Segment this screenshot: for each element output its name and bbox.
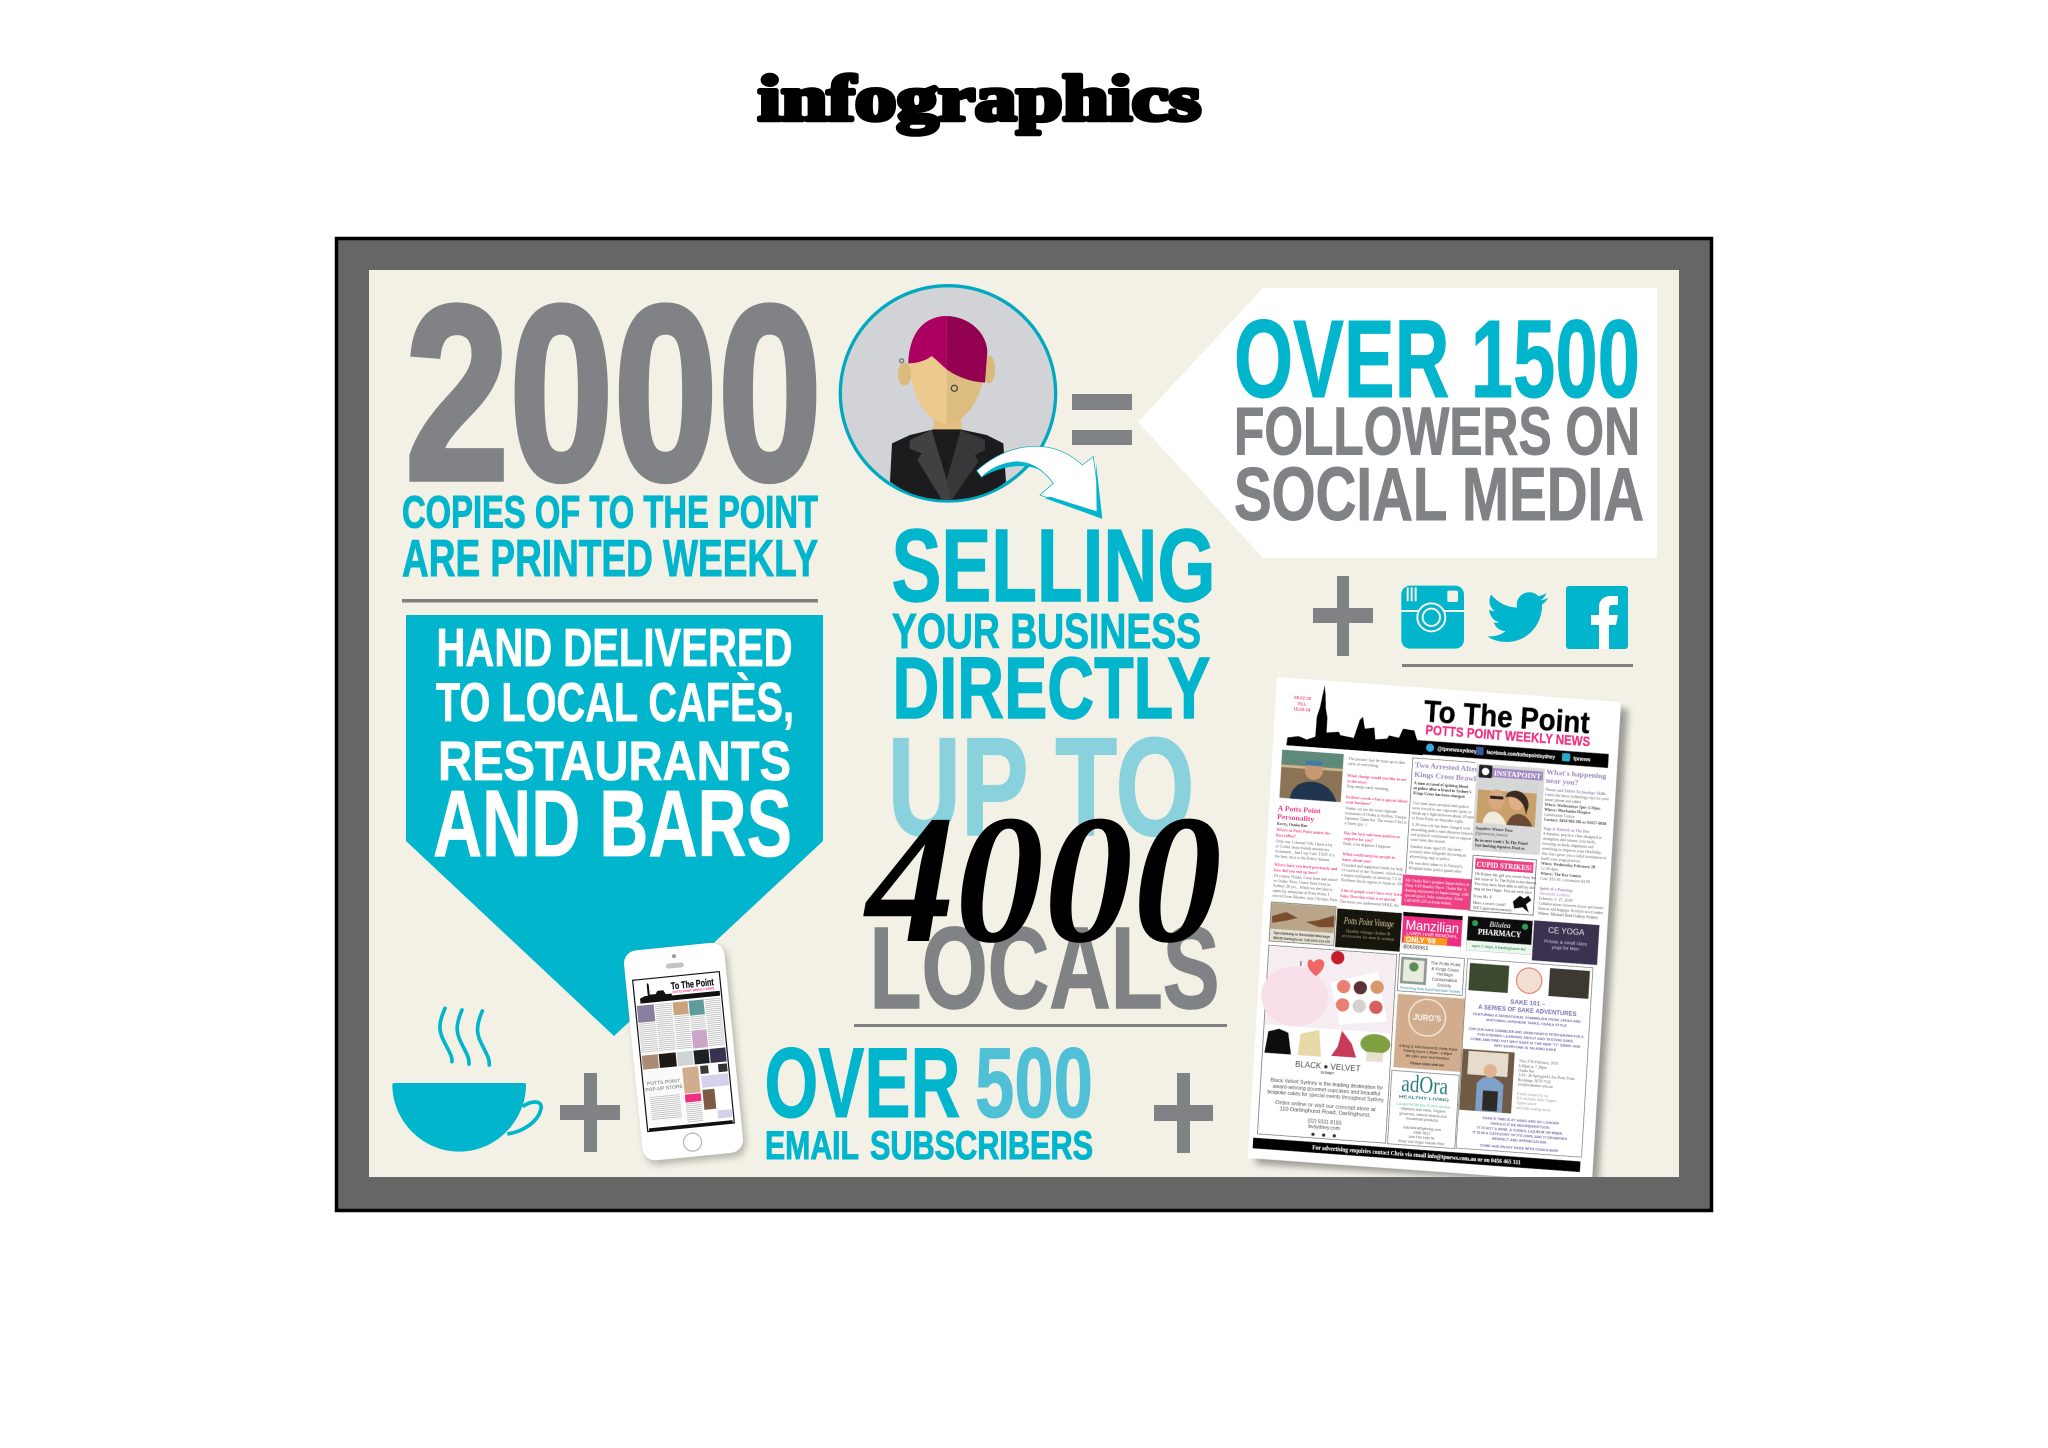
column: what's happening: Yoga & Rebirth at The Rex — [1543, 826, 1590, 834]
advert: black velvet cupcakes: I — [1300, 959, 1302, 968]
column: two arrested article: A 28-year-old has been charged with — [1411, 822, 1470, 831]
advert: adora healthy living: Vitamins and minis, Organic — [1400, 1107, 1446, 1114]
column: what's happening: Community Centre — [1544, 812, 1575, 819]
column: what's happening: What's happening — [1546, 767, 1607, 781]
stat: over 500 email subscribers — [764, 1027, 1093, 1168]
column: interview continued: What change would you like to see — [1347, 773, 1407, 782]
column: what's happening: When: Wednesdays 2pm-3.30pm — [1544, 802, 1601, 811]
icon: smartphone showing newsletter — [623, 941, 747, 1166]
icon: avatar portrait in circle — [840, 286, 1056, 501]
speech callout: over 1500 followers — [1138, 288, 1657, 558]
newsletter masthead: 15.02.18 — [1293, 706, 1311, 713]
column: interview continued: The more you understand SAKE, the — [1340, 899, 1399, 909]
advert: sake 101: Tues 27th February, 2018 — [1519, 1059, 1558, 1067]
column: two arrested article: in Potts Point on Saturday night. — [1412, 815, 1464, 824]
advert: black velvet cupcakes — [1253, 945, 1397, 1143]
column: what's happening: Roscar and bagpipe Scottish wool maker — [1538, 906, 1604, 915]
column: what's happening: stretching to improve your flexibility, — [1542, 846, 1602, 856]
column: two arrested article: Another man, aged 25, has been — [1410, 843, 1462, 853]
column: two arrested article: assaulting police and offensive behaviour — [1411, 827, 1478, 837]
column: cupid strikes: You may have been able to tell by the — [1474, 881, 1535, 890]
newsletter masthead: To The Point — [1423, 693, 1591, 740]
column: interview continued: know about you? — [1342, 857, 1372, 864]
column: interview continued: in the area? — [1347, 778, 1367, 785]
advert: adora healthy living: Local FROM the PODS similar — [1396, 1101, 1451, 1109]
banner text: RESTAURANTS — [438, 729, 791, 792]
advert: heritage society: Preserving Potts Point Past Each Century — [1400, 986, 1461, 994]
column: Potts Point personality: open my restaurant at Potts Point, I — [1273, 888, 1330, 898]
advert: sake 101 — [1456, 959, 1593, 1157]
advert: adora healthy living: Join The Hub St. — [1408, 1135, 1435, 1141]
icon: facebook — [1566, 586, 1628, 649]
column: what's happening: Learn the latest technology tips for your — [1545, 792, 1610, 802]
advert: sake 101: Osaka Bar — [1518, 1069, 1535, 1074]
advert: sake 101: and Sake tasting menu — [1516, 1106, 1551, 1112]
icon: plus sign before social icons — [1313, 576, 1373, 656]
column: Potts Point personality: restaurant... but I say Cafe TXST 4 is — [1275, 848, 1335, 858]
newsletter page: To The Point — [1248, 677, 1628, 1186]
column: cupid strikes: last issue of To The Point is not shown. — [1474, 876, 1537, 885]
ad: potts point vintage: Quality vintage clothes & — [1346, 928, 1391, 936]
ad: pharmacy: PHARMACY — [1478, 927, 1521, 939]
column: what's happening: Collaborations between music performer — [1538, 901, 1605, 910]
column: two arrested article: advertising sign at police. — [1409, 853, 1451, 861]
advert: black velvet cupcakes: SYDNEY — [1320, 1071, 1335, 1076]
column: interview continued: a funny guy :) — [1344, 820, 1368, 827]
column: interview continued: negative for you? — [1343, 836, 1373, 843]
column: interview continued: Stop ramps early morning. — [1347, 784, 1389, 792]
icon: equals sign — [1072, 394, 1132, 445]
column: interview continued: A lot of people won't have ever tried — [1340, 888, 1403, 897]
column: what's happening: smart phone and tablet. — [1545, 797, 1582, 805]
icon: instagram — [1401, 586, 1464, 649]
column: two arrested article: Hospital under police guard after — [1409, 865, 1462, 874]
advert: heritage society: Society — [1437, 982, 1452, 988]
arrow: from avatar to selling text — [977, 446, 1102, 519]
ad: pharmacy — [1466, 916, 1533, 955]
advert: adora healthy living: adOra — [1401, 1071, 1449, 1101]
newsletter masthead: POTTS POINT WEEKLY NEWS — [1425, 722, 1591, 749]
column: Potts Point personality — [1272, 750, 1347, 904]
footer bar of newsletter — [1253, 1138, 1581, 1172]
column: interview continued: Japanese Tapas bar. The owner Chef is — [1345, 815, 1407, 825]
advert: sake 101: JOIN OUR SAKE SOMMELIER AND JAPAN FANATIC PETER BROWN FOR A — [1468, 1027, 1584, 1039]
column: interview continued: restaurant of Osaka in Sydney. Unique — [1345, 810, 1407, 820]
ad: CE yoga: yoga for Men — [1552, 945, 1579, 952]
advert: sake 101: FUN EVENING LEARNING ABOUT AND TASTING SAKE. — [1477, 1032, 1574, 1043]
newsletter masthead: TILL — [1297, 701, 1307, 707]
phone screen: POP-UP STORE — [645, 1084, 684, 1094]
column: interview continued — [1340, 756, 1413, 909]
column: Potts Point personality: in Osaka. Now, I have been lived in — [1273, 878, 1331, 888]
locals: LOCALS — [870, 903, 1220, 1033]
advert: juro's: 4 Shop 5, 149 Victoria St, Potts Point — [1399, 1044, 1458, 1052]
column: instapoint: Just hashtag #tpnews Find us — [1474, 842, 1525, 851]
advert: heritage society — [1397, 954, 1465, 995]
column: what's happening: Where: Maybanke Hospice — [1544, 807, 1591, 815]
stat: 2000 copies printed weekly — [402, 254, 822, 588]
newsletter masthead: tpnews — [1573, 756, 1591, 763]
column: Potts Point personality: Of course, Osaka. I was born and raised — [1274, 873, 1338, 884]
ad: pharmacy: open 7 days, 9 Darlinghurst Rd — [1472, 944, 1526, 952]
500 number: 500 — [975, 1027, 1093, 1138]
banner text: AND BARS — [433, 771, 792, 877]
ad: CE yoga: Private & small class — [1544, 938, 1588, 947]
column: instapoint: @geminicat_bearers — [1475, 830, 1509, 838]
column: what's happening: Phone and Tablet Technology Skills — [1545, 787, 1606, 796]
advert: heritage society: & Kings Cross — [1431, 966, 1459, 973]
column: cupid strikes: From Mr. P — [1473, 893, 1493, 900]
column: interview continued: What would surprise people to — [1343, 851, 1395, 860]
directly: DIRECTLY — [892, 640, 1210, 737]
column: instapoint — [1472, 764, 1545, 855]
column: Potts Point personality: Where have you lived previously and — [1274, 862, 1338, 872]
copies caption line 1: COPIES OF TO THE POINT — [402, 486, 818, 538]
column: Potts Point personality: Kerry, Osaka Bar — [1277, 821, 1308, 828]
column: what's happening: 12.30-4pm — [1541, 866, 1559, 872]
column: interview continued: The person! Just let must up to date — [1348, 756, 1406, 765]
advert: sake 101: COME AND ENJOY SAKE WITH OSAKA BAR! — [1480, 1143, 1559, 1153]
phone screen — [633, 972, 734, 1132]
column: cupid strikes — [1470, 855, 1538, 915]
ad: potts point vintage: accessories for men & women — [1342, 933, 1395, 942]
column: two arrested article: Kings Cross has been charged. — [1413, 790, 1466, 799]
column: interview continued: Both, a lot negative I suppose. — [1343, 841, 1392, 850]
text block: selling your business directly — [892, 508, 1216, 737]
column: interview continued: Osaka, we are the most regional — [1345, 805, 1398, 815]
advert: sake 101: SAKE 101 – — [1510, 999, 1546, 1008]
advert: juro's: Trading hours 7.30am - 4.30pm — [1403, 1049, 1452, 1056]
column: interview continued: Has the luck suit been positive or — [1344, 830, 1401, 839]
advert: sake 101: info@osakabar.com.au — [1517, 1083, 1553, 1089]
advert: adora healthy living — [1387, 1070, 1459, 1149]
advert: sake 101: Kindly hosted by us: — [1517, 1092, 1549, 1098]
column: instapoint: Sapphire Winter Pom — [1475, 825, 1513, 833]
column: two arrested article: Two Arrested After — [1415, 760, 1479, 774]
advert: black velvet cupcakes: BLACK ● VELVET — [1295, 1060, 1361, 1073]
column: two arrested article: Call 0430 225 to book tickets. — [1404, 897, 1452, 906]
ad: CE yoga: CE YOGA — [1548, 926, 1585, 938]
advert: sake 101: IT IS IN A CATEGORY OF ITS OWN, AND IT DESERVES — [1472, 1130, 1568, 1141]
column: what's happening: build your yoga practice. — [1541, 856, 1581, 863]
column: what's happening: Where: The Rex Centre — [1540, 871, 1581, 879]
column: Potts Point personality: A Potts Point — [1278, 803, 1321, 815]
email subscribers caption — [765, 1124, 1093, 1168]
advert: black velvet cupcakes: bespoke cakes for special events throughout Sydney. — [1267, 1089, 1385, 1104]
ad: potts point vintage — [1335, 908, 1402, 952]
column: cupid strikes: Have a secret crush? — [1473, 900, 1506, 907]
email subscribers caption: EMAIL — [765, 1124, 859, 1168]
advert: adora healthy living: adorahealthyliving.com — [1403, 1125, 1441, 1132]
advert: adora healthy living: 9380 9812 — [1413, 1131, 1431, 1136]
advert: black velvet cupcakes: (02) 9331 8183 — [1307, 1118, 1342, 1127]
advert: sake 101: 1/24 - 26 Springfield Ave Potts Point — [1518, 1073, 1576, 1081]
column: two arrested article: My Osaka Bar's premier Japan dishes at — [1405, 877, 1470, 887]
advert: sake 101: SHOULD IT BE MISUNDERSTOOD. — [1490, 1121, 1551, 1130]
column: two arrested article: at police after a brawl in Sydney's — [1413, 785, 1472, 794]
column: what's happening — [1538, 767, 1613, 920]
column: Potts Point personality: Only one I choose? Oh, I have a lot — [1276, 838, 1333, 848]
column: two arrested article: were forced to use capsicum spray to — [1412, 805, 1472, 814]
column: two arrested article: A man accused of spitting blood — [1414, 780, 1469, 789]
icon: coffee cup with steam — [392, 1008, 541, 1152]
big number 2000: 2000 — [405, 254, 822, 532]
column: interview continued: In three words what is special about — [1346, 794, 1408, 804]
advert: sake 101: IT IS NOT A WINE, A VODKA, LIQUEUR OR BEER. — [1477, 1125, 1563, 1136]
column: what's happening: Alexander Lyubkin — [1539, 891, 1570, 898]
column: two arrested article: Kings Cross Brawl — [1414, 770, 1476, 783]
over 1500: OVER 1500 — [1234, 298, 1640, 421]
ad: manzilian — [1401, 912, 1463, 954]
column: two arrested article: arrested after allegedly throwing an — [1410, 848, 1467, 857]
your business: YOUR BUSINESS — [892, 605, 1201, 659]
newsletter masthead — [1286, 683, 1612, 769]
advert: sake 101: Appreciation — [1516, 1101, 1537, 1107]
advert: heritage society: Heritage — [1437, 972, 1454, 978]
advert: adora healthy living: HEALTHY LIVING — [1399, 1094, 1450, 1103]
advert: black velvet cupcakes: award-winning gourmet cupcakes and beautiful — [1272, 1084, 1380, 1098]
column: Potts Point personality: moved from Rhodes, near Olympic Park. — [1272, 893, 1338, 904]
ad: massage therapy — [1269, 902, 1336, 946]
newsletter masthead: 08.02.18 — [1294, 695, 1312, 701]
advert: adora healthy living: groceries, natural beauty and — [1399, 1111, 1447, 1119]
ad: CE yoga — [1532, 920, 1599, 965]
advert row — [1269, 901, 1599, 966]
advert: sake 101: COME AND FIND OUT WHY SAKE IS THE NEW "IT" DRINK AND — [1470, 1037, 1581, 1049]
icon: plus sign after cup — [560, 1073, 620, 1152]
column: two arrested article: special guest, Sake sommelier. From — [1404, 892, 1464, 902]
OVER label: OVER — [764, 1027, 960, 1138]
column: interview continued: style of everything. — [1348, 761, 1379, 768]
column: two arrested article: court later this month. — [1410, 837, 1446, 844]
advert: heritage society: Conservation — [1432, 977, 1458, 983]
newsletter masthead: facebook.com/tothepointsydney — [1487, 750, 1555, 761]
advert: juro's: JURO'S — [1413, 1012, 1442, 1024]
column: two arrested article: and granted conditional bail to appear in — [1411, 832, 1475, 841]
column: interview continued: Sake. Describe what is so special — [1340, 893, 1396, 902]
banner text: TO LOCAL CAFÈS, — [436, 671, 794, 733]
ad: manzilian: ONLY '69 — [1406, 936, 1436, 946]
column: interview continued: of survival of the Tsunami, which was — [1341, 867, 1403, 878]
phone screen: POTTS POINT — [647, 1078, 680, 1087]
advert: black velvet cupcakes: bvsydney.com — [1308, 1124, 1340, 1132]
up to: UP TO — [888, 708, 1194, 865]
advert: black velvet cupcakes: 110 Darlinghurst Road, Darlinghurst. — [1279, 1106, 1371, 1119]
column: interview continued: Northern Awaji region of Japan in 1995. — [1341, 877, 1406, 887]
column: two arrested article: Two men were arrested after police — [1413, 800, 1469, 809]
email subscribers caption: SUBSCRIBERS — [870, 1124, 1093, 1168]
ad: potts point vintage: Potts Point Vintage — [1343, 917, 1394, 930]
column: two arrested article: break up a fight between about 20 men — [1412, 810, 1474, 820]
column: what's happening: Cost: $10.50, concession $4.50 — [1540, 876, 1590, 885]
stat: up to 4000 locals — [863, 708, 1222, 1033]
advert: adora healthy living: household products. — [1406, 1117, 1439, 1123]
ad: manzilian: Manzilian — [1405, 916, 1460, 936]
column: two arrested article — [1401, 758, 1482, 911]
advert: juro's: We cater your next function — [1405, 1054, 1449, 1061]
column: cupid strikes: ring on her finger. You are very nice — [1474, 886, 1532, 895]
column: Potts Point personality: Where in Potts Point makes the — [1276, 827, 1331, 836]
column: cupid strikes: Tell Cupid anonymously — [1473, 905, 1512, 913]
newsletter masthead: @tpnewssydney — [1437, 746, 1477, 755]
column: what's happening: A dynamic practice class designed to — [1543, 831, 1602, 840]
column: interview continued: a major earthquake of intensity 7.2 in — [1341, 872, 1401, 882]
advert: adora healthy living: Shop Via Organ Hackle Rise — [1398, 1139, 1445, 1146]
followers on: FOLLOWERS ON — [1234, 394, 1640, 470]
banner text: HAND DELIVERED — [436, 618, 792, 678]
column: what's happening: Contact: 0434 984 286 or 92657-0830 — [1543, 817, 1607, 826]
advert: juro's — [1393, 994, 1465, 1072]
big number 4000: 4000 — [863, 777, 1222, 981]
column: Potts Point personality: Sydney 20 yrs... When we decided to — [1273, 883, 1333, 892]
panel: hand delivered teal banner — [406, 615, 823, 1036]
column: instapoint: Be in next week's To The Point! — [1475, 837, 1528, 846]
column: Potts Point personality: best coffee? — [1276, 832, 1296, 839]
advert: black velvet cupcakes: Black Velvet Sydney is the leading destination for — [1270, 1078, 1383, 1092]
column: cupid strikes: Oh Kinsey the girl you wrote from the — [1475, 871, 1536, 880]
advert: sake 101: MATCHING JAPANESE TAPAS, OSAKA STYLE — [1486, 1018, 1568, 1028]
column: what's happening: focusing on body alignment and — [1542, 841, 1594, 849]
phone screen: To The Point — [670, 977, 715, 992]
column: what's happening: strengthen and release your body, — [1542, 836, 1596, 845]
column: what's happening: Where: Michael Reid Gallery Sydney — [1538, 911, 1598, 920]
advert: sake 101: WHY EVERYONE IS TALKING SAKE — [1494, 1044, 1557, 1052]
phone screen: POTTS POINT WEEKLY NEWS — [672, 986, 715, 994]
ad: manzilian: 80698961 — [1403, 944, 1429, 952]
title: infographics — [758, 63, 1201, 135]
column: Potts Point personality: how did you end up here? — [1274, 867, 1318, 875]
column: two arrested article: He was then taken to St Vincent's — [1409, 860, 1463, 869]
advert: sake 101: FEATURING A SENSATIONAL SOMMELIER FROM JAPAN AND — [1473, 1012, 1581, 1024]
column: what's happening: February 3- 27, 2018 — [1539, 896, 1573, 904]
advert: sake 101: $35 includes Sake Tippers — [1517, 1097, 1558, 1103]
selling: SELLING — [892, 508, 1216, 623]
column: Potts Point personality: the best, next to the Police Station. — [1275, 853, 1330, 863]
icon: twitter bird — [1487, 592, 1548, 642]
column: two arrested article: sharing enjoyment of Japan eating, with — [1405, 887, 1469, 898]
column: interview continued: Founded and supported funds for help — [1342, 862, 1403, 872]
advert: sake 101: SAKE'S TIME IS AT HAND AND NO LONGER — [1482, 1116, 1559, 1125]
column: two arrested article: Shop 1/24 Stanley Place. Osaka Bar is — [1405, 882, 1467, 892]
icon: plus sign after email — [1154, 1073, 1213, 1153]
column: what's happening: near you? — [1546, 776, 1579, 787]
social media: SOCIAL MEDIA — [1234, 452, 1644, 536]
advert: sake 101: RESPECT AND APPRECIATION. — [1492, 1137, 1547, 1145]
column: what's happening: this class gives you a solid foundation to — [1541, 851, 1607, 860]
column: what's happening: Spirit of a Painting: — [1539, 886, 1573, 893]
ad: pharmacy: Bilulea — [1489, 920, 1511, 930]
advert: sake 101: A SERIES OF SAKE ADVENTURES — [1478, 1004, 1577, 1018]
column: Potts Point personality: Personality — [1277, 812, 1315, 824]
panel: framed infographic background — [336, 238, 1712, 1210]
column: what's happening: When: Wednesday February 20 — [1541, 861, 1595, 870]
advert: sake 101: Bookings: 9078 7142 — [1518, 1078, 1551, 1084]
column: interview continued: your business? — [1346, 800, 1371, 806]
infographic canvas — [334, 72, 1714, 1212]
ad: massage therapy: 88/166 Darlinghurst. Call 0413 223 410 — [1273, 935, 1331, 944]
advert: heritage society: The Potts Point — [1431, 960, 1461, 968]
copies caption line 2: ARE PRINTED WEEKLY — [402, 530, 818, 588]
ad: manzilian: LASER HAIR REMOVAL — [1406, 930, 1458, 939]
column: cupid strikes: CUPID STRIKES! — [1476, 859, 1532, 872]
advert: sake 101: 6.30pm to 7.30pm — [1519, 1064, 1547, 1070]
banner text — [433, 618, 794, 877]
advert: black velvet cupcakes: Order online or visit our concept store at — [1275, 1100, 1376, 1113]
advert: juro's: Please come visit us! — [1410, 1061, 1444, 1068]
column: instapoint: INSTAPOINT — [1494, 768, 1541, 781]
footer bar of newsletter: For advertising enquiries contact Chris via email info@tpnews.com.au or on 0456 465 311 — [1312, 1144, 1521, 1166]
column: Potts Point personality: of Coffee shop friends around my — [1275, 843, 1330, 852]
ad: massage therapy: Specialising in Remedial Massage — [1273, 930, 1331, 939]
